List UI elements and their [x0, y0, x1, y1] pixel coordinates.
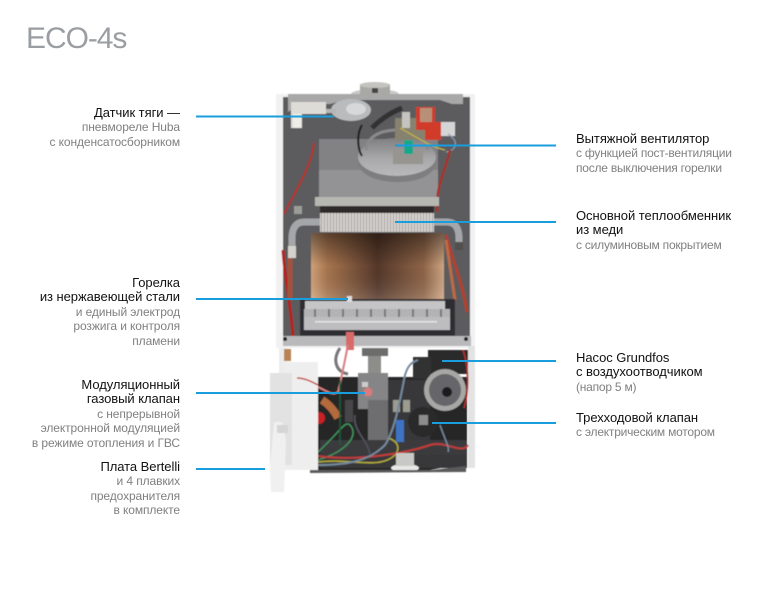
combustion chamber — [311, 233, 444, 299]
flap — [270, 422, 286, 492]
label: exhaust fan — [576, 131, 732, 175]
label: heat exchanger: Основной теплообменник — [576, 208, 731, 223]
dark burner recess — [300, 299, 455, 337]
exhaust fan — [358, 107, 455, 182]
label: control board: Плата Bertelli — [100, 459, 180, 474]
heat exchanger — [288, 206, 463, 258]
label: gas valve — [32, 377, 180, 450]
label: pump: (напор 5 м) — [576, 380, 636, 394]
gas valve — [358, 348, 388, 440]
label: gas valve: электронной модуляцией — [41, 421, 180, 435]
label: control board: в комплекте — [113, 503, 180, 517]
label: exhaust fan: с функцией пост-вентиляции — [576, 146, 732, 160]
top bracket — [288, 94, 463, 112]
label: draught sensor: Датчик тяги — — [94, 105, 180, 120]
burner — [304, 296, 450, 330]
lower casing sides — [468, 346, 475, 468]
label: exhaust fan: после выключения горелки — [576, 161, 722, 175]
lower chamber back — [317, 377, 467, 470]
red wires upper — [284, 143, 314, 214]
label: exhaust fan: Вытяжной вентилятор — [576, 131, 709, 146]
label: three-way valve — [576, 410, 715, 439]
flue outlet — [351, 82, 399, 99]
label: heat exchanger: с силуминовым покрытием — [576, 238, 722, 252]
label: pump: Насос Grundfos — [576, 350, 669, 365]
label: three-way valve: с электрическим мотором — [576, 425, 715, 439]
label: burner: Горелка — [132, 275, 180, 290]
title: ECO-4s — [26, 22, 126, 55]
label: pump — [576, 350, 703, 394]
three-way valve motor — [408, 407, 438, 437]
boiler casing — [276, 94, 475, 348]
bottom shadow — [310, 466, 466, 473]
copper pipes — [288, 258, 292, 300]
label: draught sensor — [49, 105, 180, 149]
lower frame bar — [283, 336, 471, 346]
hood bar — [315, 197, 439, 206]
label: gas valve: с непрерывной — [97, 407, 180, 421]
label: burner: и единый электрод — [76, 305, 180, 319]
label: gas valve: Модуляционный — [81, 377, 180, 392]
fan motor red part — [416, 107, 441, 140]
parts near valve — [313, 412, 325, 424]
mounting plate — [319, 139, 438, 197]
label: gas valve: в режиме отопления и ГВС — [32, 436, 180, 450]
label: burner: розжига и контроля — [73, 319, 180, 333]
gas hose — [336, 348, 348, 374]
label: draught sensor: с конденсатосборником — [49, 135, 180, 149]
cables — [318, 424, 353, 460]
draught sensor — [291, 99, 371, 128]
label: heat exchanger: из меди — [576, 222, 623, 237]
label: draught sensor: пневмореле Huba — [82, 120, 180, 134]
pump — [413, 350, 468, 411]
label: heat exchanger — [576, 208, 732, 252]
control panel — [270, 349, 318, 492]
upper chamber back wall — [283, 97, 470, 337]
label: control board — [90, 459, 180, 517]
label: control board: и 4 плавких — [117, 474, 180, 488]
bottom fitting — [391, 464, 419, 472]
label: gas valve: газовый клапан — [87, 391, 180, 406]
label: three-way valve: Трехходовой клапан — [576, 410, 698, 425]
label: burner: из нержавеющей стали — [40, 289, 180, 304]
label: control board: предохранителя — [90, 489, 180, 503]
label: burner: пламени — [132, 334, 180, 348]
label: burner — [40, 275, 180, 348]
label: pump: с воздухоотводчиком — [576, 364, 703, 379]
callout lines — [196, 116, 556, 469]
